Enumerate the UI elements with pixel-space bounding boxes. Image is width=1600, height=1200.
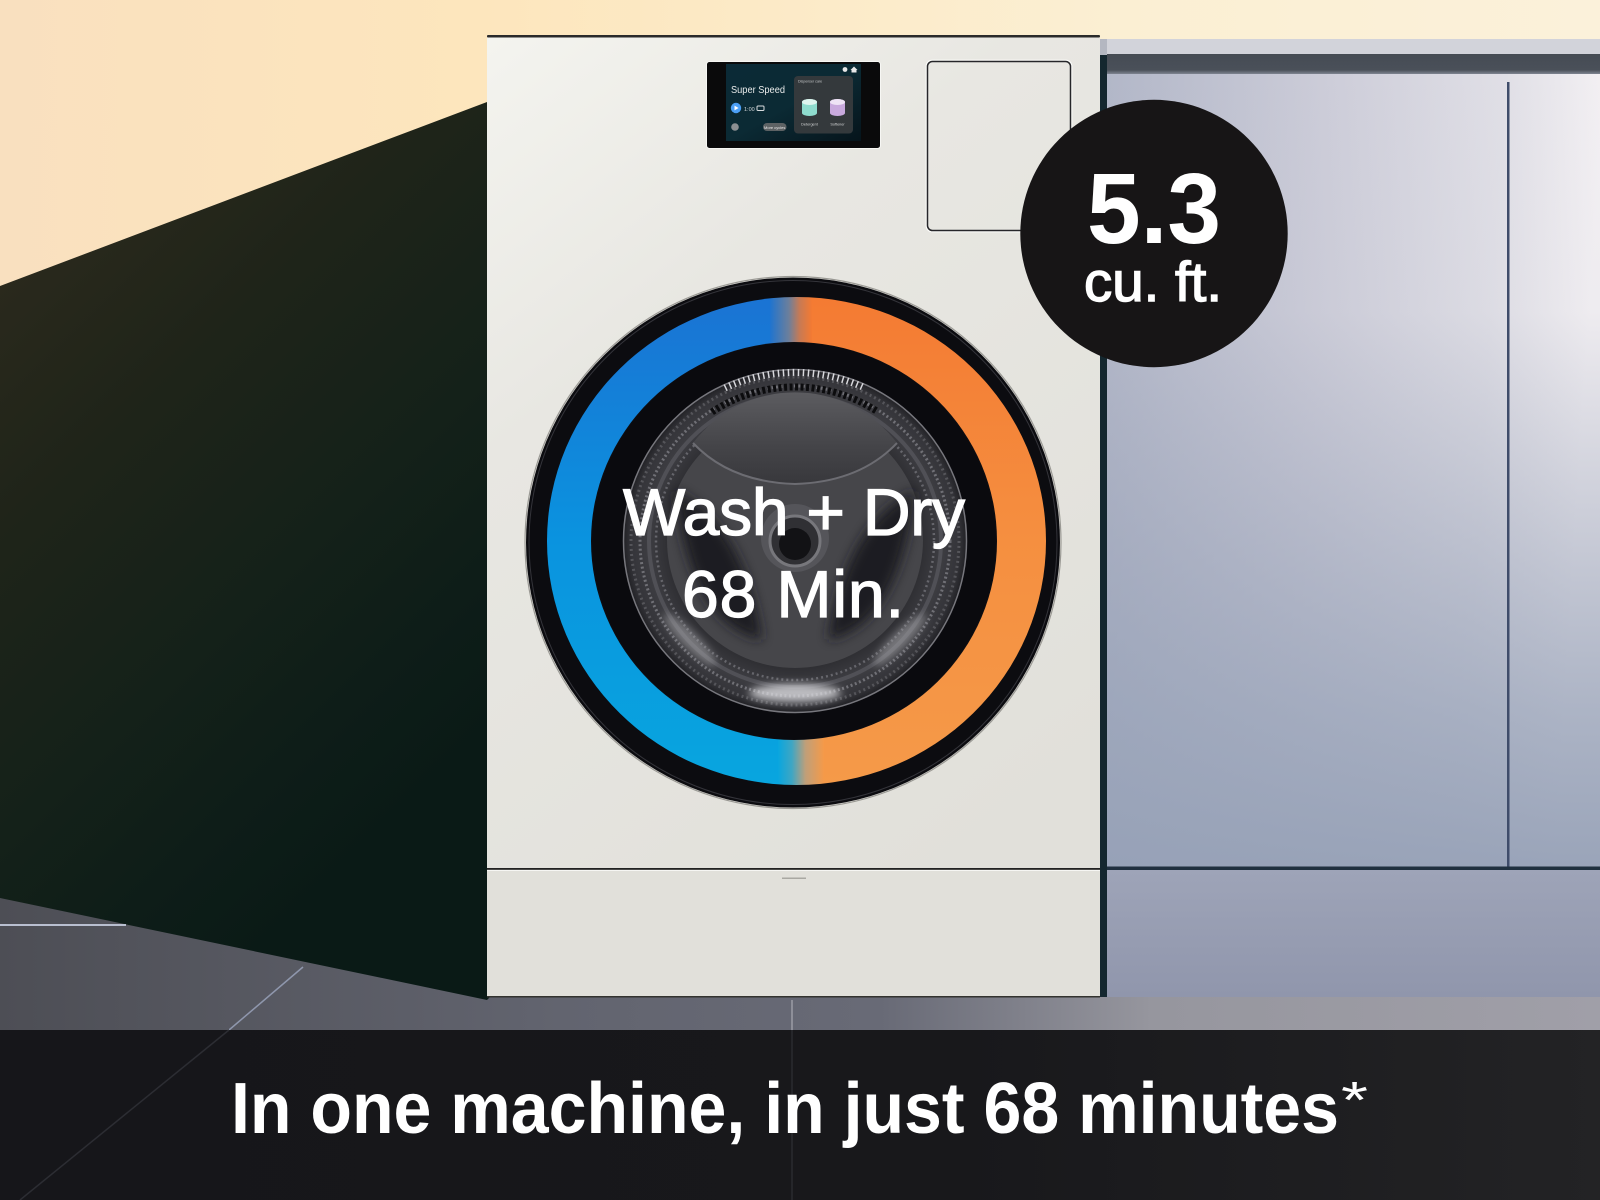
caption band bbox=[0, 1030, 1600, 1200]
time: 1:00 bbox=[744, 107, 755, 113]
dispenser card: Detergent bbox=[801, 122, 819, 126]
status icons bbox=[843, 66, 858, 72]
cabinet plinth bbox=[1107, 869, 1600, 997]
door text bbox=[623, 475, 965, 631]
side cabinet bbox=[1100, 39, 1600, 997]
drum bbox=[623, 369, 967, 713]
dispenser card bbox=[794, 76, 853, 134]
more cycles pill bbox=[763, 123, 786, 131]
washer top edge bbox=[487, 35, 1100, 38]
top crescent bbox=[693, 392, 897, 484]
washer body bbox=[487, 36, 1100, 997]
drum hub bbox=[761, 504, 829, 572]
washer bottom edge bbox=[487, 996, 1100, 998]
perforation rings bbox=[631, 372, 959, 705]
dispenser card: Softener bbox=[830, 122, 845, 126]
capacity badge bbox=[1020, 100, 1288, 367]
screen wallpaper bbox=[726, 64, 861, 141]
reflected tile lines bbox=[20, 1030, 792, 1200]
dark wedges between arms bbox=[675, 490, 915, 640]
play button bbox=[731, 103, 741, 113]
door text: 68 Min. bbox=[682, 557, 904, 631]
time icon bbox=[757, 106, 764, 110]
drum back wall bbox=[667, 412, 923, 668]
cabinet dark recess bbox=[1107, 54, 1600, 74]
title: Super Speed bbox=[731, 85, 785, 96]
cabinet door divider bbox=[1507, 82, 1510, 868]
control screen bbox=[706, 62, 880, 148]
caption text: In one machine, in just 68 minutes bbox=[231, 1069, 1339, 1149]
settings button bbox=[731, 123, 739, 131]
door bbox=[525, 276, 1061, 808]
floor tile lines bbox=[0, 925, 792, 1030]
spider top highlight bbox=[693, 443, 897, 484]
cabinet seam bbox=[1107, 866, 1600, 870]
band background bbox=[0, 1030, 1600, 1200]
drum glass bbox=[623, 369, 967, 713]
wash and dry colour ring bbox=[540, 290, 1055, 790]
capacity value: 5.3 bbox=[1087, 153, 1221, 265]
floor bbox=[0, 880, 1600, 1040]
capacity unit: cu. ft. bbox=[1084, 250, 1222, 313]
softener cup bbox=[830, 99, 845, 116]
wall shadow bbox=[0, 102, 490, 1000]
pedestal seam bbox=[487, 868, 1100, 997]
bottom glass highlight bbox=[659, 609, 931, 702]
door rim bbox=[525, 276, 1061, 808]
badge circle bbox=[1020, 100, 1288, 367]
pedestal handle bbox=[782, 878, 806, 879]
door text: Wash + Dry bbox=[623, 475, 965, 549]
caption text: * bbox=[1341, 1072, 1368, 1130]
more cycles pill: More cycles bbox=[764, 125, 785, 130]
dispenser drawer bbox=[926, 60, 1072, 232]
detergent cup bbox=[802, 99, 817, 116]
cabinet shadow gap bbox=[1100, 39, 1108, 997]
inner gasket bbox=[592, 343, 996, 739]
washer bbox=[487, 35, 1100, 998]
cabinet top strip bbox=[1107, 39, 1600, 54]
dispenser card: Dispenser care bbox=[798, 80, 822, 84]
cabinet door bbox=[1107, 74, 1600, 868]
screen frame bbox=[706, 62, 880, 148]
